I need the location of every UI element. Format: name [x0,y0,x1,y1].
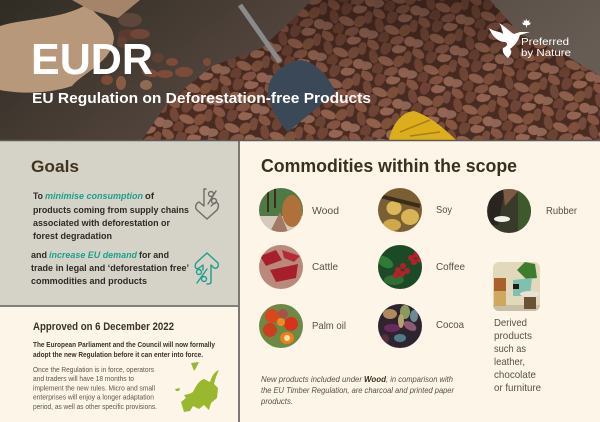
panel: goals [0,141,238,305]
commodity: coffee: Coffee [436,261,465,273]
goal 1 text: forest degradation [33,231,112,241]
commodity: derived products: or furniture [494,382,541,394]
logo: Preferred by Nature: by Nature [521,48,572,59]
logo: Preferred by Nature [489,19,572,59]
header photo: cocoa beans [0,0,600,140]
approval heading: Approved on 6 December 2022 [33,321,174,333]
commodity: cocoa: Cocoa [436,319,464,331]
approval body text: Once the Regulation is in force, operators [33,365,154,374]
commodity: derived products: products [494,330,532,342]
scoop [268,60,336,132]
goal 1 text: To [33,191,44,201]
approval lead text: adopt the new Regulation before it can enter into force. [33,352,203,359]
approval lead text [33,342,215,359]
commodity: cocoa [378,304,464,348]
note on wood products: , in comparison with [386,375,453,384]
goals heading: Goals [31,157,79,176]
divider lines [0,140,600,422]
goal 1 text: products coming from supply chains [33,205,189,215]
subtitle: EU Regulation on Deforestation-free Products [32,90,371,107]
approval lead text: The European Parliament and the Council will now formally [33,342,215,349]
approval body text: enterprises will enjoy a longer adaptation [33,392,154,402]
hand [0,4,114,93]
goal 2 text: trade in legal and ‘deforestation free’ [31,263,189,273]
approval body text: and traders will have 18 months to [33,374,134,383]
scoop handle [240,5,280,62]
map: Europe [175,362,219,412]
note on wood products: Wood [364,375,386,384]
goal 2 text: and [31,250,47,260]
goal 1 text: of [145,191,154,201]
commodity: palm oil [259,304,346,348]
approval body text: implement the new rules. Micro and small [33,384,155,392]
note on wood products: products. [260,397,293,406]
commodity: cattle: Cattle [312,261,338,273]
goal 2 text: increase EU demand [49,250,138,260]
commodity: rubber: Rubber [546,205,577,217]
goal 2 text [31,250,189,286]
commodity: wood [259,188,339,232]
commodity: soy: Soy [436,204,453,216]
commodity: derived products: leather, [494,356,525,368]
commodity: soy [378,188,453,232]
commodity: derived products: Derived [494,317,527,329]
panel: approval [33,321,219,412]
note on wood products: the EU Timber Regulation, are charcoal and printed paper [261,386,454,395]
goal 1 text: minimise consumption [45,191,143,201]
icon: down arrow with percent [196,189,218,219]
heading: commodities: Commodities within the scope [261,155,517,176]
commodity: derived products: such as [494,343,526,355]
commodity: coffee [375,245,465,289]
commodity: rubber [487,189,577,233]
cocoa pod [389,111,456,140]
goal 2 text: for and [139,250,169,260]
commodity: cattle [259,245,338,289]
title: EUDR [31,35,153,84]
icon: up arrow with percent [195,253,218,284]
commodity: wood: Wood [312,205,339,217]
goal 1 text: associated with deforestation or [33,218,171,228]
note on wood products [260,375,454,406]
note on wood products: New products included under [261,375,362,384]
goal 1 text [33,191,189,241]
commodity: palm oil: Palm oil [312,320,346,332]
commodity: derived products: chocolate [494,369,536,381]
logo: Preferred by Nature: Preferred [521,37,569,48]
approval body text: period, as well as other specific provisions. [33,402,157,411]
approval body text [33,365,157,411]
commodity: derived products [493,262,541,394]
goal 2 text: commodities and products [31,276,147,286]
